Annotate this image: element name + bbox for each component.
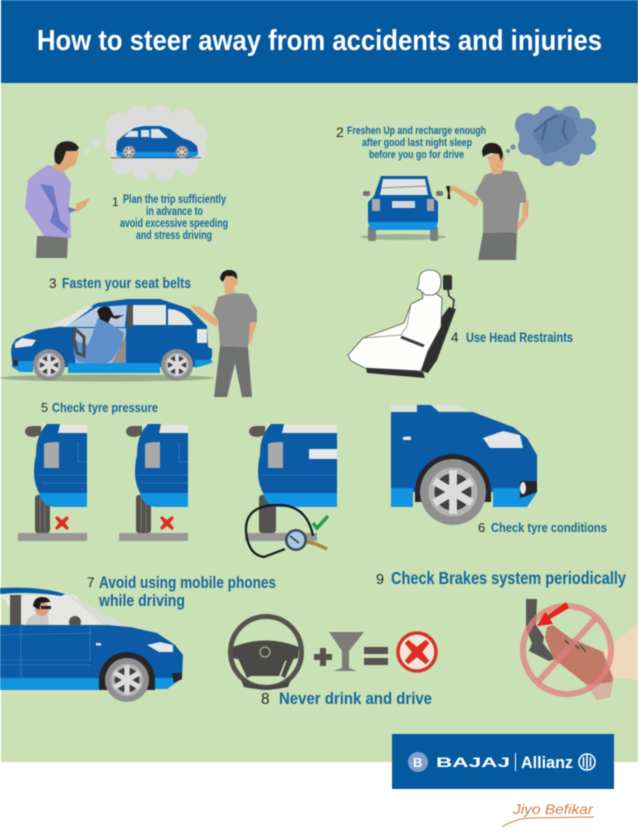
text: tip 5: 5 [41, 401, 48, 415]
text: tip 9: 9 [376, 572, 384, 588]
text: tip 2: after good last night sleep [362, 137, 472, 149]
icon: red cross circle [398, 633, 436, 671]
tip 4: head restraints [348, 270, 573, 378]
text: tip 1: avoid excessive speeding [120, 218, 228, 230]
icon: driver on phone in car [0, 588, 183, 702]
text: tip 3: Fasten your seat belts [62, 275, 191, 292]
title banner [1, 0, 638, 83]
icon: steering wheel [230, 616, 302, 690]
icon: sleep thought cloud [506, 106, 596, 166]
text: tip 7: 7 [87, 575, 95, 590]
text: tip 2: Freshen Up and recharge enough [347, 125, 486, 137]
text: tip 5: Check tyre pressure [52, 401, 158, 415]
text: tip 1: and stress driving [136, 230, 212, 242]
icon: plus sign [314, 648, 332, 666]
icon: correctly inflated tyre with gauge [245, 424, 337, 557]
text: tip 6: Check tyre conditions [491, 521, 607, 535]
tip 3: fasten seat belts [0, 270, 257, 397]
icon: under-inflated tyre two [119, 424, 188, 541]
text: tip 1: 1 [112, 195, 119, 209]
tip 6: check tyre conditions [391, 405, 607, 535]
tip 2: rest before driving [336, 106, 596, 260]
text: tip 4: 4 [451, 330, 459, 345]
text: tip 6: 6 [478, 520, 485, 535]
text: tip 4: Use Head Restraints [466, 330, 573, 345]
text: tip 2 [336, 124, 486, 161]
figure: man holding keys [446, 143, 529, 260]
icon: martini glass [329, 632, 364, 671]
text: tip 2: 2 [336, 124, 344, 140]
text: tip 2: before you go for drive [369, 149, 464, 161]
text: tip 7: while driving [98, 592, 185, 610]
icon: foot on brake pedal with prohibition sign [523, 599, 638, 700]
icon: front car wheel close-up [391, 405, 537, 525]
logo: Bajaj Allianz [392, 734, 614, 789]
text: tip 1 [112, 194, 228, 242]
figure: man in purple shirt [25, 141, 90, 258]
logo: Bajaj Allianz: Allianz [521, 753, 573, 772]
icon: thought cloud with car [84, 105, 208, 180]
text: tip 1: Plan the trip sufficiently [123, 194, 226, 206]
text: tip 1: in advance to [146, 206, 203, 218]
icon: rear view of car [360, 176, 446, 241]
tip 1: man thinking about planning the trip [25, 105, 228, 258]
text: tip 7 [87, 574, 276, 610]
logo: Bajaj Allianz: BAJAJ [436, 754, 510, 770]
icon: car with open door and driver [0, 299, 214, 382]
icon: seated person with head restraint [348, 270, 456, 378]
text: tip 7: Avoid using mobile phones [99, 574, 276, 592]
figure: man leaning on car [190, 270, 257, 397]
icon: equals sign [364, 647, 388, 665]
tagline: Jiyo Befikar signature: Jiyo Befikar [512, 801, 594, 817]
tagline: Jiyo Befikar signature [502, 801, 594, 827]
text: tip 3: 3 [49, 276, 57, 291]
text: tip 8: 8 [261, 691, 270, 708]
tip 7: avoid mobile phones [0, 574, 276, 702]
tip 5: check tyre pressure [18, 401, 337, 557]
logo: Bajaj Allianz: B [413, 755, 422, 770]
tip 8: never drink and drive [230, 616, 436, 708]
icon: under-inflated tyre one [18, 424, 87, 541]
text: tip 8: Never drink and drive [279, 690, 432, 708]
tip 9: check brakes [376, 568, 638, 700]
